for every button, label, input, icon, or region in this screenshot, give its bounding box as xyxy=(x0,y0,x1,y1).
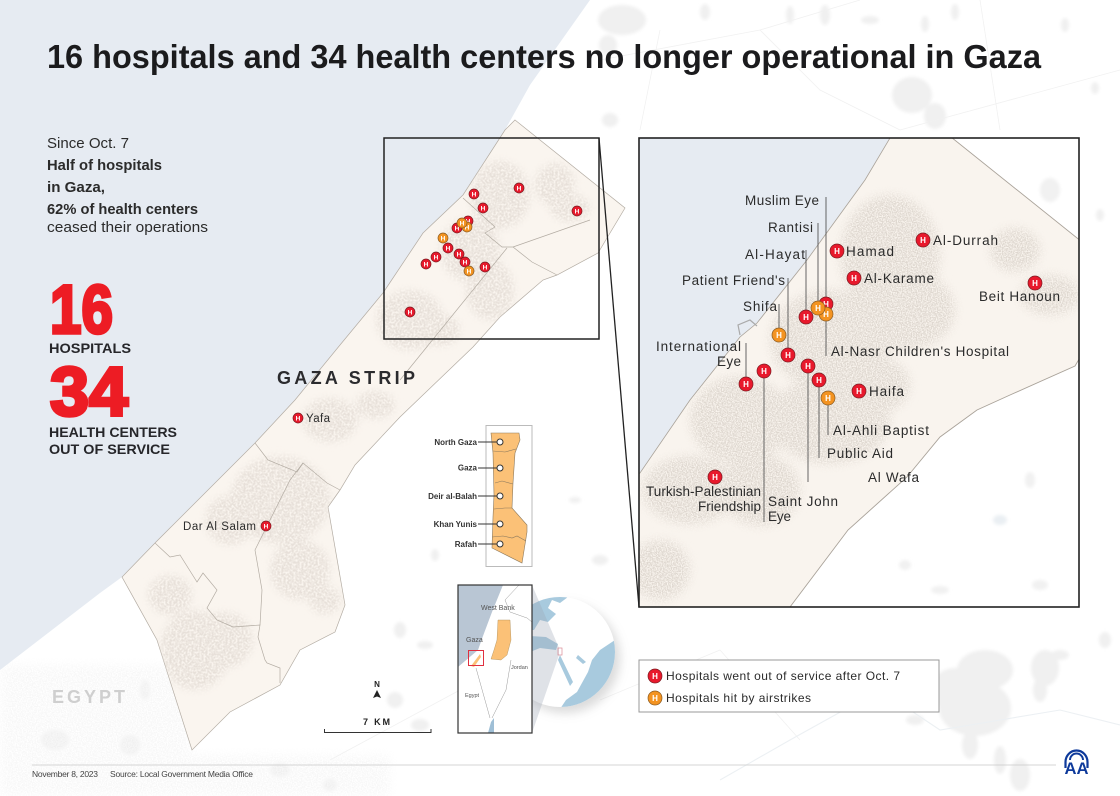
hospital markers: H xyxy=(776,331,782,340)
hospital labels: Al-Nasr Children's Hospital xyxy=(831,344,1009,359)
inset: locator map: Egypt xyxy=(465,693,480,699)
overview frame with markers: H xyxy=(472,191,477,198)
overview frame with markers: H xyxy=(467,268,472,275)
overview frame with markers: H xyxy=(465,224,470,231)
marker: Yafa xyxy=(293,413,331,425)
stat: 34 health centers: HEALTH CENTERS xyxy=(49,424,177,440)
legend: H xyxy=(652,694,658,703)
hospital labels: Rantisi xyxy=(768,220,813,235)
marker: Dar Al Salam: H xyxy=(264,524,269,530)
hospital markers: H xyxy=(823,310,829,319)
overview frame with markers: H xyxy=(481,205,486,212)
inset: governorates of Gaza: Rafah xyxy=(455,540,477,549)
footer: date and source: November 8, 2023 xyxy=(32,769,98,779)
sea xyxy=(0,0,590,670)
leader lines xyxy=(746,197,828,522)
marker: Dar Al Salam: Dar Al Salam xyxy=(183,521,256,533)
marker: Yafa: H xyxy=(296,416,301,422)
overview frame with markers: H xyxy=(455,225,460,232)
hospital labels: Friendship xyxy=(698,499,761,514)
overview frame with markers: H xyxy=(446,245,451,252)
overview frame with markers: H xyxy=(483,264,488,271)
intro text: Half of hospitals xyxy=(47,158,162,174)
hospital labels: International xyxy=(656,339,741,354)
intro text: 62% of health centers xyxy=(47,202,198,218)
marker: Yafa: Yafa xyxy=(306,413,331,425)
scale bar: 7 KM xyxy=(363,717,390,727)
hospital labels: Al-Durrah xyxy=(933,233,998,248)
hospital markers: H xyxy=(805,362,811,371)
map: Gaza Strip xyxy=(122,120,625,750)
hospital markers: H xyxy=(712,473,718,482)
hospital labels: Eye xyxy=(717,354,741,369)
stat: 34 health centers xyxy=(49,353,177,457)
overview frame with markers: H xyxy=(460,220,465,227)
intro text: ceased their operations xyxy=(47,220,208,236)
scale bar xyxy=(324,717,431,732)
logo: Anadolu Agency xyxy=(1064,750,1088,778)
hospital labels: Al-Karame xyxy=(864,271,934,286)
hospital labels: Shifa xyxy=(743,299,777,314)
hospital markers: H xyxy=(920,236,926,245)
map label: Egypt: EGYPT xyxy=(52,687,125,707)
stat: 16 hospitals: 16 xyxy=(50,271,113,348)
stat: 34 health centers: 34 xyxy=(50,353,128,430)
footer: date and source xyxy=(32,769,253,779)
inset: governorates of Gaza: Deir al-Balah xyxy=(428,492,477,501)
overview frame with markers: H xyxy=(463,259,468,266)
hospital labels: Patient Friend's xyxy=(682,273,785,288)
inset: locator map xyxy=(458,585,562,733)
hospital labels: Beit Hanoun xyxy=(979,289,1060,304)
overview frame with markers: H xyxy=(517,185,522,192)
hospital markers: H xyxy=(1032,279,1038,288)
overview frame with markers: H xyxy=(575,208,580,215)
hospital markers: H xyxy=(761,367,767,376)
overview frame with markers: H xyxy=(424,261,429,268)
hospital markers: H xyxy=(803,313,809,322)
connector line to detail map xyxy=(599,138,639,607)
hospital labels: Al Wafa xyxy=(868,470,919,485)
hospital markers xyxy=(708,233,1042,484)
hospital labels: Al-Hayat xyxy=(745,247,805,262)
hospital labels: Turkish-Palestinian xyxy=(646,484,761,499)
logo: Anadolu Agency: AA xyxy=(1064,759,1088,778)
inset: locator map: Jordan xyxy=(511,665,528,671)
stat: 34 health centers: OUT OF SERVICE xyxy=(49,441,170,457)
footer rule xyxy=(32,764,1056,766)
hospital markers: H xyxy=(823,300,829,309)
legend: Hospitals went out of service after Oct. 7 xyxy=(666,669,900,683)
hospital labels: Eye xyxy=(768,509,791,524)
hospital markers: H xyxy=(816,376,822,385)
map label: Gaza Strip: GAZA STRIP xyxy=(277,368,415,388)
title: 16 hospitals and 34 health centers no longer operational in Gaza xyxy=(47,38,1042,75)
overview frame with markers: H xyxy=(457,251,462,258)
footer: date and source: Source: Local Government Media Office xyxy=(110,769,253,779)
overview frame with markers: H xyxy=(441,235,446,242)
hospital labels: Saint John xyxy=(768,494,838,509)
intro text xyxy=(47,136,208,236)
hospital labels xyxy=(646,193,1060,524)
hospital markers: H xyxy=(815,304,821,313)
hospital labels: Hamad xyxy=(846,244,894,259)
hospital labels: Public Aid xyxy=(827,446,893,461)
inset: locator map: Gaza xyxy=(466,637,483,644)
overview frame with markers: H xyxy=(434,254,439,261)
intro text: Since Oct. 7 xyxy=(47,136,129,152)
hospital markers: H xyxy=(834,247,840,256)
legend: Hospitals hit by airstrikes xyxy=(666,691,811,705)
inset: governorates of Gaza: North Gaza xyxy=(434,438,478,447)
hospital labels: Muslim Eye xyxy=(745,193,819,208)
north arrow xyxy=(373,680,381,698)
hospital markers: H xyxy=(825,394,831,403)
inset: governorates of Gaza: Gaza xyxy=(458,464,478,472)
overview frame with markers: H xyxy=(408,309,413,316)
inset: governorates of Gaza: Khan Yunis xyxy=(434,520,478,529)
legend xyxy=(639,660,939,712)
intro text: in Gaza, xyxy=(47,180,105,196)
hospital labels: Haifa xyxy=(869,384,904,399)
globe xyxy=(532,597,624,716)
north arrow: N xyxy=(374,680,380,689)
panel: detail map of northern Gaza xyxy=(638,137,1080,608)
hospital markers: H xyxy=(851,274,857,283)
hospital markers: H xyxy=(743,380,749,389)
inset: locator map: West Bank xyxy=(481,605,515,612)
hospital labels: Al-Ahli Baptist xyxy=(833,423,929,438)
overview frame with markers: H xyxy=(466,218,471,225)
stat: 16 hospitals: HOSPITALS xyxy=(49,340,131,356)
hospital markers: H xyxy=(785,351,791,360)
inset: governorates of Gaza xyxy=(428,426,532,566)
hospital markers: H xyxy=(856,387,862,396)
overview frame with markers xyxy=(384,138,599,339)
legend: H xyxy=(652,672,658,681)
